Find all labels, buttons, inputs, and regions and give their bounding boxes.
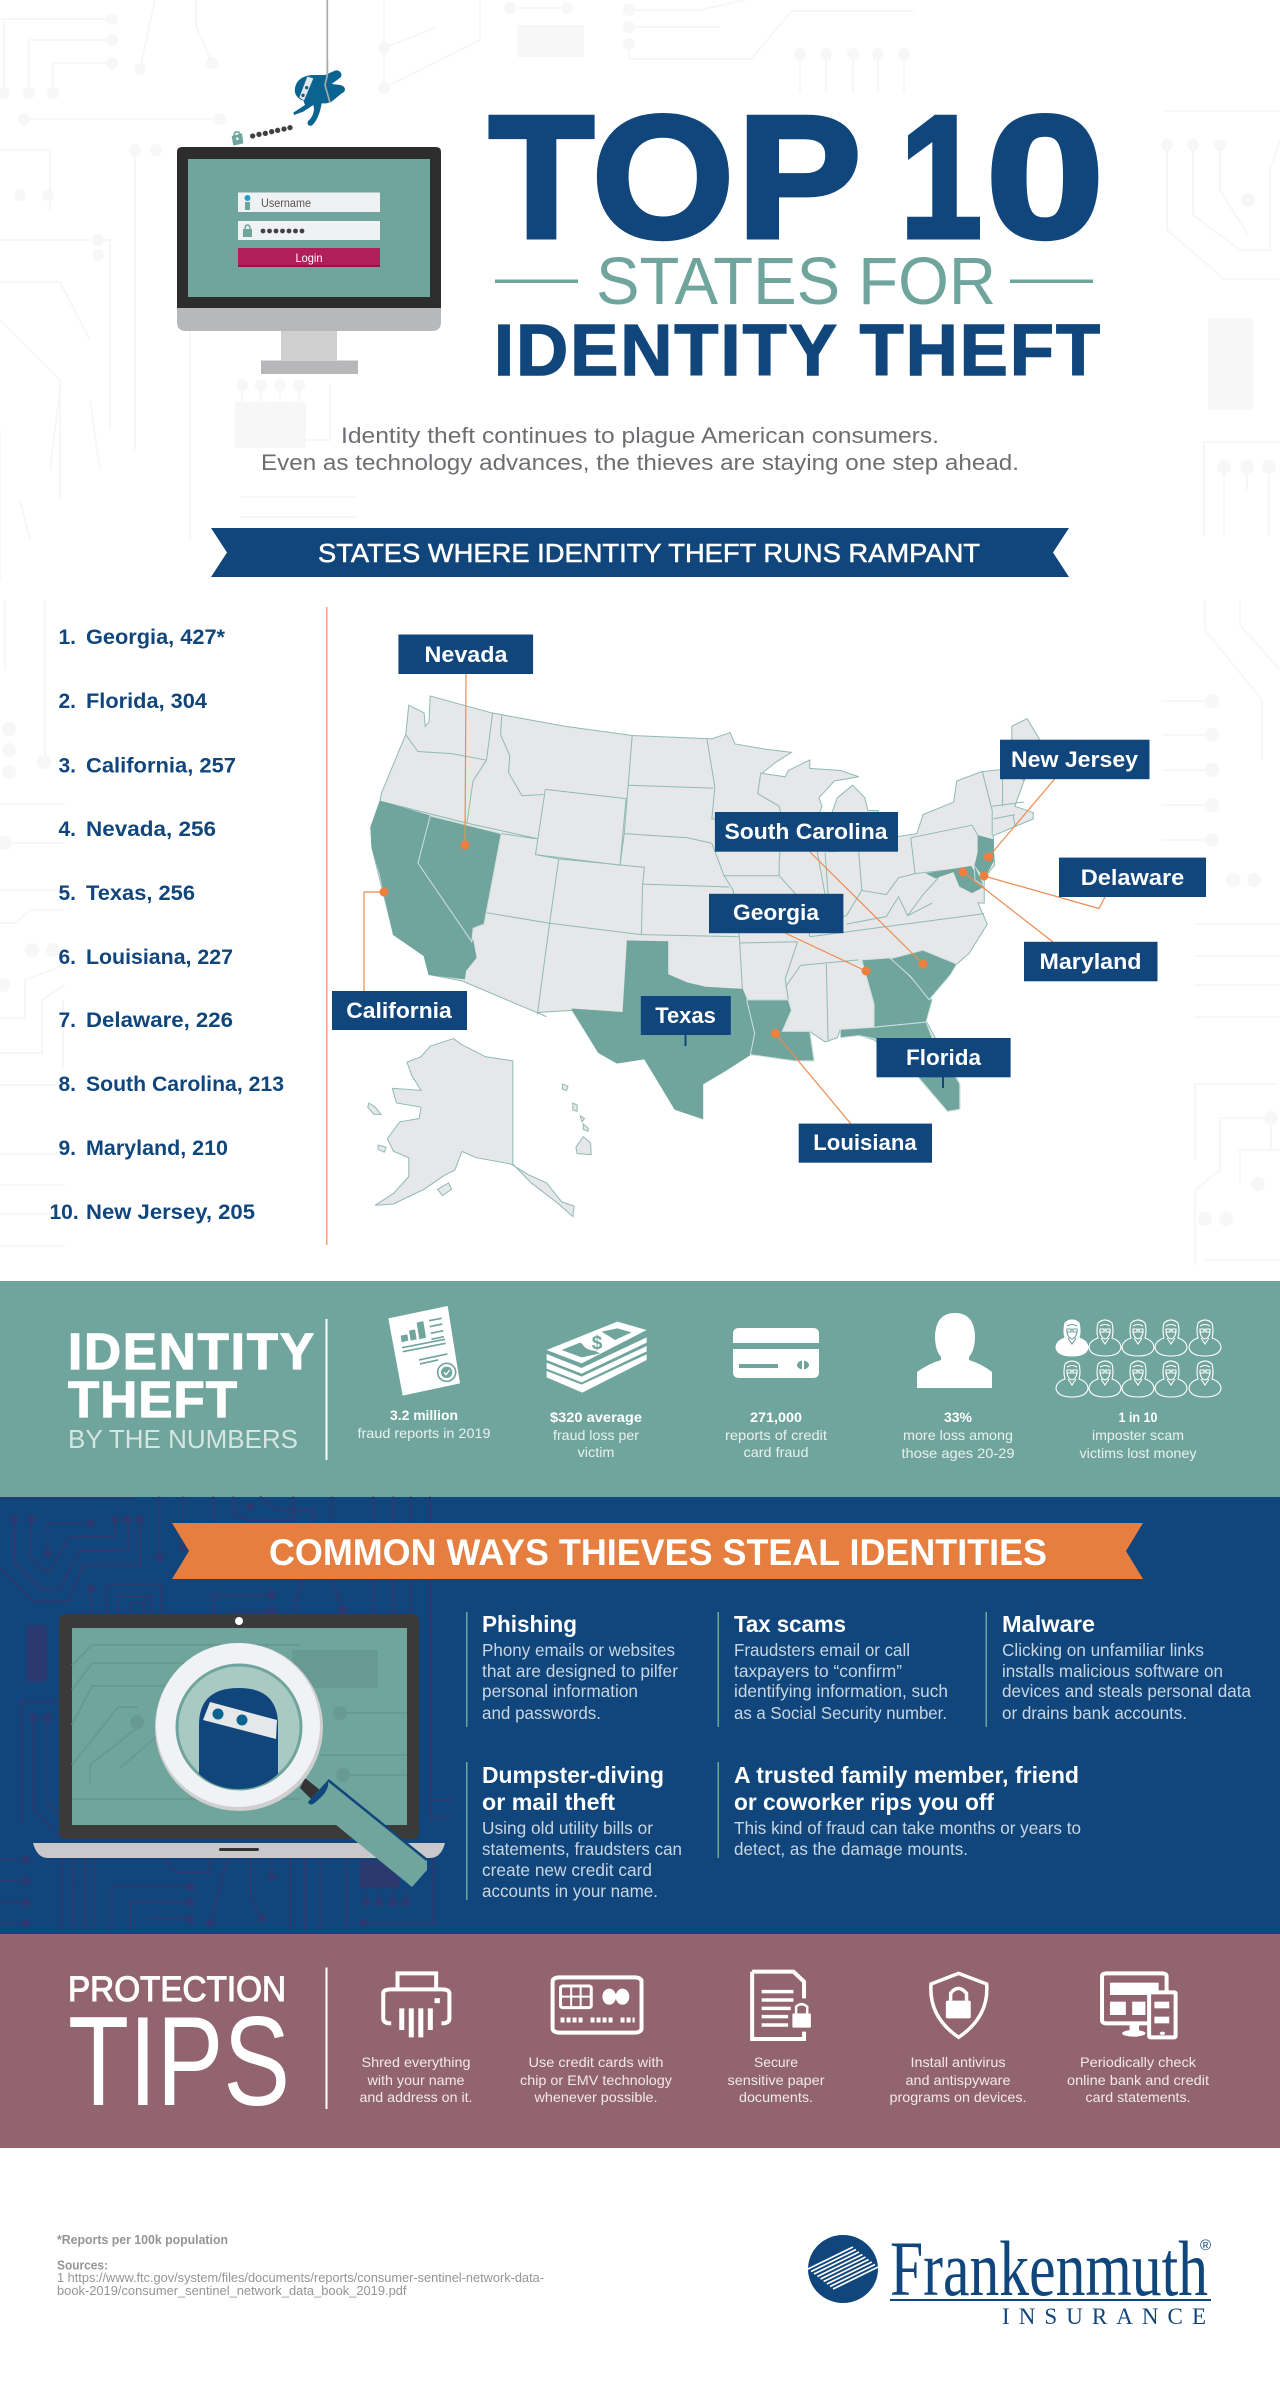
stat: young adult loss: 33% [944,1409,973,1425]
label: Georgia [709,894,843,933]
text block: trusted family member [734,1762,1081,1859]
label: New Jersey [1000,740,1150,779]
label: Georgia: Georgia [733,900,820,925]
text block: trusted family member: A trusted family member, friend [734,1762,1079,1788]
contiguous states [371,696,1039,1119]
rank 1: Georgia, 427* [86,626,226,649]
label: Maryland [1024,942,1158,981]
label: Louisiana: Louisiana [813,1130,918,1155]
text block: tax scams [734,1611,948,1723]
highlighted: South Carolina [891,950,957,1000]
background circuit pattern [0,0,1280,1265]
banner: orange heading [172,1523,1143,1579]
icon: person silhouette [917,1313,992,1388]
callout dots [380,840,993,1038]
rank 8: South Carolina, 213 [86,1073,284,1096]
text block: tax scams: as a Social Security number. [734,1703,947,1723]
icon: dollar sign: $ [592,1333,603,1354]
text block: phishing: and passwords. [482,1703,601,1723]
stat: credit card fraud [725,1409,827,1460]
rank 7: Delaware, 226 [86,1009,233,1032]
text block: malware: installs malicious software on [1002,1661,1223,1681]
stat: fraud reports: fraud reports in 2019 [358,1425,491,1441]
banner: states heading [211,528,1069,577]
label: Nevada [398,634,533,674]
icon: chip credit card [553,1977,642,2033]
text block: malware: or drains bank accounts. [1002,1703,1187,1723]
tip: chip cards: chip or EMV technology [520,2072,672,2088]
text block: dumpster-diving: Dumpster-diving [482,1762,664,1788]
hacker head [199,1688,278,1789]
banner: states heading: STATES WHERE IDENTITY THEFT RUNS RAMPANT [318,538,980,568]
highlighted: California [371,801,476,979]
label: Texas: Texas [655,1003,716,1028]
tip: check statements [1067,2054,1209,2105]
icon: desktop computer with login [177,147,441,374]
text block: tax scams: Tax scams [734,1611,846,1637]
text block: phishing: Phony emails or websites [482,1640,675,1660]
tip: chip cards: whenever possible. [533,2089,658,2105]
stat: credit card fraud: card fraud [744,1444,808,1460]
label: Texas [641,996,731,1035]
label: Nevada: Nevada [424,642,508,667]
stat: fraud reports [358,1407,491,1441]
rank 9: 9. [58,1137,76,1160]
icon: shield with padlock [931,1973,987,2037]
text block: phishing: personal information [482,1681,638,1701]
footnote and sources [57,2233,544,2298]
rank 6: 6. [58,946,76,969]
text block: trusted family member: This kind of fraud can take months or years to [734,1818,1081,1838]
icon: shredder [383,1973,449,2037]
rank 3: 3. [58,754,76,778]
Alaska and Hawaii islands [368,1084,591,1196]
rank 7: 7. [58,1009,76,1032]
tip: shred: and address on it. [360,2089,472,2105]
tip: antivirus: programs on devices. [890,2089,1026,2105]
title: T [489,79,594,274]
ranked state list [50,626,284,1224]
stat: young adult loss: those ages 20-29 [902,1445,1015,1461]
text block: tax scams: Fraudsters email or call [734,1640,910,1660]
title: STATES FOR [596,244,996,319]
stat: average loss: fraud loss per [553,1427,639,1443]
footnote and sources: *Reports per 100k population [57,2233,228,2247]
stat: average loss: victim [578,1444,614,1460]
icon: stack of cash [547,1322,647,1393]
icon: computer and phone [1102,1973,1176,2037]
text block: dumpster-diving: Using old utility bills or [482,1818,653,1838]
highlighted: Texas [572,941,755,1119]
stat: credit card fraud: 271,000 [750,1409,802,1425]
tip: chip cards: Use credit cards with [528,2054,664,2070]
panel: common ways thieves steal identities [0,1497,1280,1934]
stat: young adult loss [902,1409,1015,1461]
map of the United States [368,696,1039,1217]
rank 5: 5. [58,882,76,905]
highlighted: Florida [840,1022,960,1111]
tip: antivirus: and antispyware [906,2072,1011,2088]
icon: credit card [733,1328,819,1378]
callout leader lines [364,674,1105,1124]
title [489,79,1104,391]
rank 5: Texas, 256 [86,882,195,905]
text block: dumpster-diving: or mail theft [482,1789,615,1815]
stat: fraud reports: 3.2 million [390,1407,458,1423]
logo: Frankenmuth Insurance [808,2225,1211,2329]
title: O [592,79,734,274]
highlighted: Delaware [974,863,984,886]
rank 2: Florida, 304 [86,690,207,713]
highlighted: Nevada [418,816,501,942]
intro text: Identity theft continues to plague American consumers. [341,423,939,448]
label: Delaware [1059,858,1206,897]
rank 4: Nevada, 256 [86,818,216,841]
rank 9: Maryland, 210 [86,1137,228,1160]
footnote and sources: Sources: [57,2258,108,2272]
icon: secured document [752,1972,811,2039]
rank 2: 2. [58,690,76,713]
text block: malware: Clicking on unfamiliar links [1002,1640,1204,1660]
rank 4: 4. [58,818,76,841]
divider lines [466,1612,987,1900]
stat: imposter scams [1080,1409,1196,1461]
label: South Carolina [715,812,898,852]
highlighted: Georgia [862,958,932,1027]
icon: fraud report document [388,1306,460,1396]
tip: check statements: online bank and credit [1067,2072,1209,2088]
tip: paper documents [728,2054,825,2105]
text block: dumpster-diving [482,1762,682,1901]
title: IDENTITY THEFT [494,311,1100,391]
username field [238,192,380,212]
text block: dumpster-diving: create new credit card [482,1860,652,1880]
intro text: Even as technology advances, the thieves are staying one step ahead. [261,450,1019,475]
text block: trusted family member: or coworker rips you off [734,1789,994,1815]
icon: stolen password dots [232,125,293,146]
stat: young adult loss: more loss among [903,1427,1013,1443]
login button: Login [296,251,322,265]
label: Delaware: Delaware [1081,865,1184,890]
state borders [380,713,1024,1042]
Alaska [375,1039,574,1217]
icon: laptop with magnifying glass [33,1614,445,1887]
title: P [737,79,858,274]
logo mark [808,2235,878,2303]
login button [238,248,380,267]
title: 0 [986,79,1104,274]
rank 10: New Jersey, 205 [86,1201,255,1224]
tip: check statements: card statements. [1086,2089,1190,2105]
text block: phishing: that are designed to pilfer [482,1661,678,1681]
tip: antivirus [890,2054,1026,2105]
stat: imposter scams: victims lost money [1080,1445,1196,1461]
rank 8: 8. [58,1073,76,1096]
label: California: California [346,998,453,1023]
intro text [261,423,1019,475]
text block: tax scams: identifying information, such [734,1681,948,1701]
text block: dumpster-diving: statements, fraudsters can [482,1839,682,1859]
panel heading: TIPS [68,1990,290,2132]
text block: malware [1002,1611,1251,1723]
stat: imposter scams: imposter scam [1092,1427,1184,1443]
text block: dumpster-diving: accounts in your name. [482,1881,658,1901]
label: South Carolina: South Carolina [724,819,888,844]
stat: average loss: $320 average [550,1409,642,1425]
footnote and sources: 1 https://www.ftc.gov/system/files/documents/reports/consumer-sentinel-network-data- [57,2271,544,2285]
tip: antivirus: Install antivirus [910,2054,1006,2070]
panel heading: IDENTITY [68,1323,314,1380]
highlighted: Louisiana [747,1000,814,1061]
highlighted: New Jersey [975,836,993,878]
panel heading: THEFT [68,1371,237,1428]
panel heading: BY THE NUMBERS [68,1424,298,1454]
label: California [332,991,467,1030]
highlighted: Maryland [927,866,984,893]
map labels [332,634,1206,1163]
rank 10: 10. [50,1201,79,1224]
tip: paper documents: documents. [739,2089,813,2105]
tip: shred: Shred everything [362,2054,470,2070]
label: Florida: Florida [906,1045,982,1070]
text block: phishing [482,1611,678,1723]
tip: shred [360,2054,472,2105]
tip: paper documents: sensitive paper [728,2072,825,2088]
stat: credit card fraud: reports of credit [725,1427,827,1443]
panel heading [68,1323,314,1454]
panel heading: PROTECTION [68,1970,286,2009]
text block: tax scams: taxpayers to “confirm” [734,1661,902,1681]
text block: trusted family member: detect, as the damage mounts. [734,1839,968,1859]
tip: chip cards [520,2054,672,2105]
rank 1: 1. [58,626,76,649]
tip: shred: with your name [366,2072,465,2088]
rank 6: Louisiana, 227 [86,946,233,969]
label: Florida [876,1038,1011,1077]
banner: orange heading: COMMON WAYS THIEVES STEAL IDENTITIES [269,1532,1047,1573]
stat: average loss [550,1409,642,1460]
panel: protection tips [0,1934,1280,2148]
logo: Frankenmuth Insurance: ® [1200,2237,1211,2254]
icon: hacker on a hook [293,0,345,126]
label: Maryland: Maryland [1040,949,1142,974]
title: 1 [900,79,982,274]
icon: ten people, one highlighted [1056,1320,1221,1397]
panel: identity theft by the numbers [0,1281,1280,1497]
text block: malware: devices and steals personal data [1002,1681,1251,1701]
label: Louisiana [799,1124,932,1163]
tip: check statements: Periodically check [1080,2054,1197,2070]
rank 3: California, 257 [86,754,236,778]
label: New Jersey: New Jersey [1011,747,1139,772]
tip: paper documents: Secure [754,2054,798,2070]
stat: imposter scams: 1 in 10 [1118,1409,1158,1425]
text block: malware: Malware [1002,1611,1095,1637]
footnote and sources: book-2019/consumer_sentinel_network_data_book_2019.pdf [57,2284,407,2298]
logo: Frankenmuth Insurance: INSURANCE [1002,2304,1206,2329]
text block: phishing: Phishing [482,1611,577,1637]
password field [238,221,380,240]
username field: Username [261,196,311,210]
